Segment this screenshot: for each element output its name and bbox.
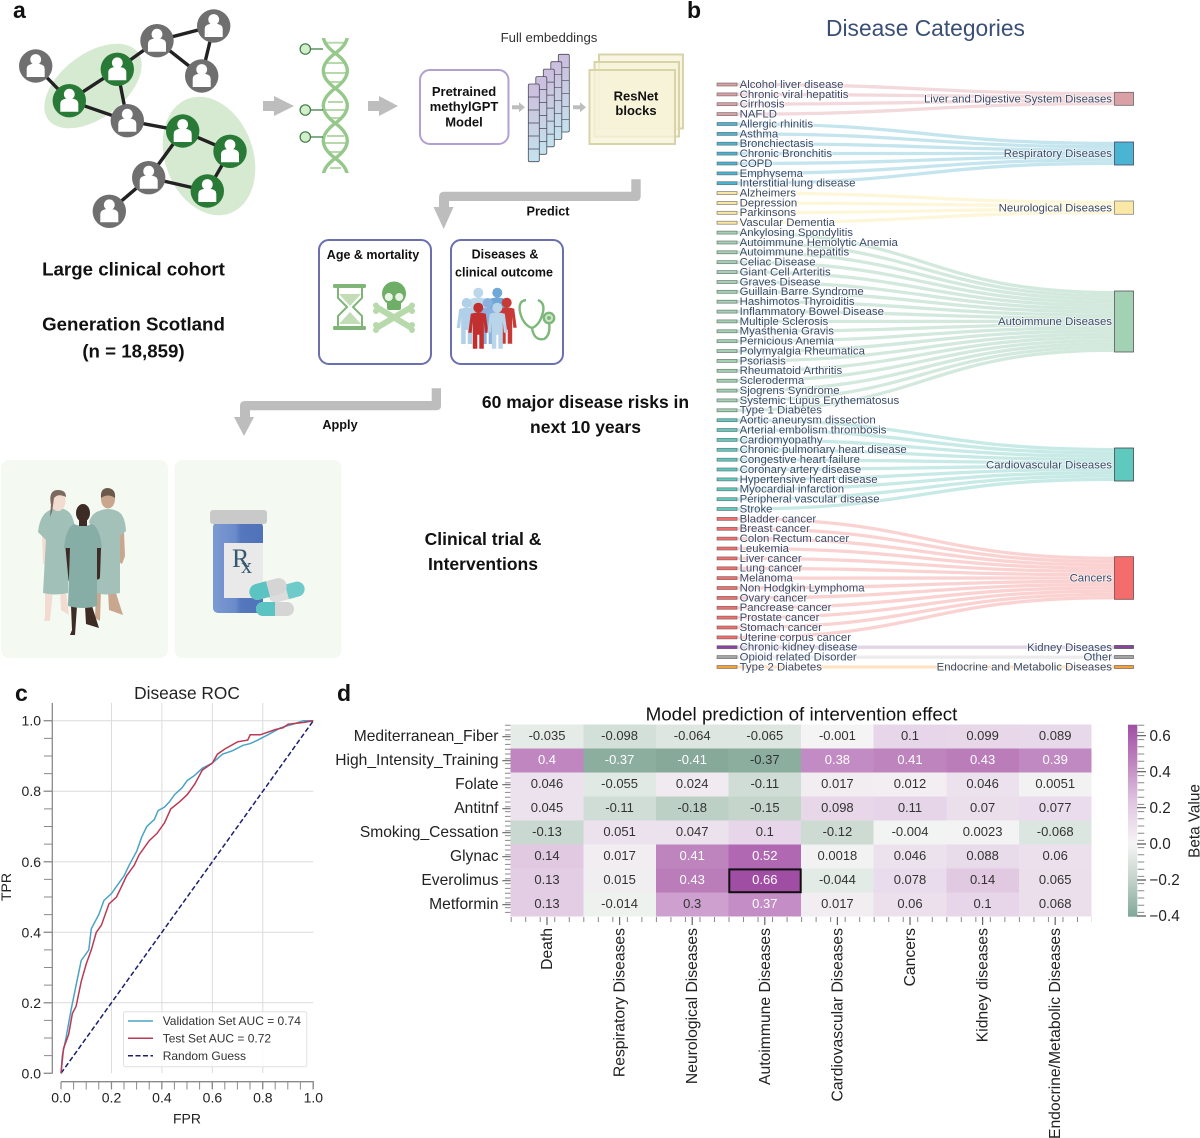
- left disease labels: Cardiomyopathy: [740, 434, 823, 446]
- left disease labels: Cirrhosis: [740, 99, 785, 111]
- legend: [124, 1012, 307, 1067]
- heatmap values: 0.098: [821, 800, 854, 815]
- box: diseases and clinical outcome: clinical outcome: [455, 266, 553, 280]
- left disease labels: COPD: [740, 158, 773, 170]
- left disease labels: Systemic Lupus Erythematosus: [740, 395, 899, 407]
- left disease labels: Chronic Bronchitis: [740, 148, 832, 160]
- heatmap values: -0.11: [750, 776, 779, 791]
- left disease labels: Rheumatoid Arthritis: [740, 365, 842, 377]
- heatmap values: -0.098: [601, 728, 638, 743]
- row labels: Folate: [455, 776, 498, 793]
- box: age and mortality: Age & mortality: [327, 248, 419, 262]
- legend: Test Set AUC = 0.72: [163, 1032, 271, 1046]
- heatmap values: 0.37: [752, 896, 777, 911]
- heatmap values: -0.065: [746, 728, 783, 743]
- left disease labels: Emphysema: [740, 168, 804, 180]
- left disease labels: Opioid related Disorder: [740, 651, 857, 663]
- legend: Random Guess: [163, 1049, 246, 1063]
- panel a: study workflow: [1, 0, 689, 658]
- label: predict: Predict: [526, 204, 570, 218]
- right category nodes and labels: Autoimmune Diseases: [998, 316, 1112, 328]
- colorbar: 0.6: [1150, 728, 1171, 745]
- heatmap values: -0.001: [819, 728, 856, 743]
- heatmap values: 0.52: [752, 848, 777, 863]
- left disease labels: Stomach cancer: [740, 622, 822, 634]
- heatmap values: 0.13: [534, 896, 560, 911]
- row labels: Smoking_Cessation: [360, 824, 498, 841]
- left disease labels: Alcohol liver disease: [740, 79, 843, 91]
- legend: Validation Set AUC = 0.74: [163, 1014, 301, 1028]
- heatmap values: 0.1: [901, 728, 919, 743]
- heatmap values: 0.047: [676, 824, 708, 839]
- heatmap values: 0.024: [676, 776, 708, 791]
- heatmap values: -0.068: [1037, 824, 1074, 839]
- heatmap values: 0.06: [1043, 848, 1068, 863]
- heatmap values: 0.088: [966, 848, 999, 863]
- heatmap values: 0.017: [603, 848, 636, 863]
- heatmap values: 0.0023: [963, 824, 1002, 839]
- heatmap cells: [511, 725, 1092, 917]
- right category nodes and labels: Other: [1084, 652, 1112, 664]
- icon: stethoscope: [520, 300, 554, 339]
- icon: DNA methylation helix: [300, 38, 349, 173]
- heatmap values: -0.014: [601, 896, 638, 911]
- left disease labels: Congestive heart failure: [740, 454, 860, 466]
- heatmap values: 0.11: [898, 800, 922, 815]
- y tick labels: 1.0: [22, 713, 41, 729]
- y tick labels: 0.0: [22, 1065, 41, 1081]
- arrow: network to DNA: [263, 96, 294, 116]
- ResNet blocks: blocks: [615, 103, 657, 118]
- x tick labels: 0.0: [51, 1090, 71, 1106]
- y tick labels: 0.6: [22, 854, 41, 870]
- panel d: intervention heatmap: [335, 680, 1200, 1138]
- text: 60 major disease risks: next 10 years: [530, 417, 641, 437]
- left disease labels: Pernicious Anemia: [740, 336, 835, 348]
- heatmap values: 0.046: [966, 776, 999, 791]
- left disease labels: Lung cancer: [740, 563, 802, 575]
- heatmap values: 0.051: [603, 824, 636, 839]
- row labels: Metformin: [429, 896, 498, 913]
- left disease labels: Vascular Dementia: [740, 217, 836, 229]
- heading: cohort: (n = 18,859): [82, 340, 185, 362]
- column labels: Endocrine/Metabolic Diseases: [1047, 928, 1064, 1138]
- panel b: disease categories sankey: [687, 0, 1134, 674]
- box: age and mortality: [319, 240, 431, 364]
- heatmap values: 0.065: [1039, 872, 1071, 887]
- right category nodes and labels: Cardiovascular Diseases: [986, 459, 1112, 471]
- left disease labels: [740, 79, 907, 673]
- left disease labels: Coronary artery disease: [740, 464, 861, 476]
- highlighted cell: Everolimus, Autoimmune Diseases: [729, 869, 801, 892]
- left disease labels: Multiple Sclerosis: [740, 316, 829, 328]
- panel: pill bottle illustration: [174, 460, 342, 658]
- left disease labels: Parkinsons: [740, 207, 796, 219]
- left disease labels: Psoriasis: [740, 355, 786, 367]
- left disease labels: Hypertensive heart disease: [740, 474, 878, 486]
- heading: cohort: [42, 258, 225, 362]
- left disease labels: Ankylosing Spondylitis: [740, 227, 853, 239]
- left disease labels: NAFLD: [740, 108, 777, 120]
- right category nodes and labels: [924, 92, 1134, 674]
- heatmap values: 0.39: [1043, 752, 1068, 767]
- heatmap values: 0.0051: [1035, 776, 1075, 791]
- left disease labels: Bladder cancer: [740, 513, 816, 525]
- column labels: Autoimmune Diseases: [757, 928, 774, 1085]
- left disease labels: Giant Cell Arteritis: [740, 267, 831, 279]
- heading: cohort: Generation Scotland: [42, 314, 225, 334]
- box: diseases and clinical outcome: [451, 240, 563, 364]
- left disease labels: Chronic kidney disease: [740, 642, 857, 654]
- column labels: Death: [539, 928, 556, 970]
- heatmap values: 0.046: [894, 848, 926, 863]
- heatmap values: 0.012: [894, 776, 926, 791]
- heatmap values: 0.045: [531, 800, 563, 815]
- label: full embeddings: Full embeddings: [501, 30, 598, 45]
- row labels: Everolimus: [421, 872, 499, 889]
- heatmap values: 0.43: [680, 872, 705, 887]
- x tick labels: 0.8: [253, 1090, 273, 1106]
- heatmap values: 0.015: [603, 872, 636, 887]
- sankey links: [737, 84, 1114, 667]
- column labels: Cardiovascular Diseases: [829, 928, 846, 1102]
- left disease labels: Type 1 Diabetes: [740, 405, 822, 417]
- left disease labels: Hashimotos Thyroiditis: [740, 296, 855, 308]
- left disease labels: Interstitial lung disease: [740, 178, 855, 190]
- heatmap values: 0.13: [534, 872, 560, 887]
- right category nodes and labels: Cancers: [1070, 573, 1112, 585]
- heatmap values: -0.035: [529, 728, 565, 743]
- column labels: Respiratory Diseases: [612, 928, 629, 1077]
- left disease labels: Allergic rhinitis: [740, 118, 813, 130]
- left disease labels: Liver cancer: [740, 553, 802, 565]
- ResNet blocks: [590, 54, 683, 144]
- panel: pill bottle illustration: x: [241, 553, 252, 578]
- right category nodes and labels: Respiratory Diseases: [1004, 148, 1112, 160]
- heatmap values: -0.004: [892, 824, 928, 839]
- left disease labels: Myocardial infarction: [740, 484, 844, 496]
- x axis label: FPR: [173, 1110, 201, 1126]
- column labels: Cancers: [902, 928, 919, 986]
- heatmap values: 0.1: [756, 824, 774, 839]
- y tick labels: 0.8: [22, 783, 41, 799]
- heatmap values: 0.3: [683, 896, 701, 911]
- left disease labels: Celiac Disease: [740, 257, 816, 269]
- left disease labels: Graves Disease: [740, 276, 821, 288]
- icon: hourglass: [333, 284, 366, 330]
- heatmap values: -0.11: [605, 800, 634, 815]
- row labels: Mediterranean_Fiber: [354, 728, 498, 745]
- left disease labels: Myasthenia Gravis: [740, 326, 834, 338]
- random guess line: [61, 721, 313, 1073]
- heatmap values: 0.41: [680, 848, 705, 863]
- left disease labels: Leukemia: [740, 543, 790, 555]
- left disease labels: Inflammatory Bowel Disease: [740, 306, 884, 318]
- left disease labels: Alzheimers: [740, 188, 796, 200]
- x tick labels: 1.0: [304, 1090, 323, 1106]
- left disease labels: Chronic viral hepatitis: [740, 89, 849, 101]
- row labels: Antitnf: [454, 800, 499, 817]
- left disease labels: Autoimmune Hemolytic Anemia: [740, 237, 899, 249]
- left disease labels: Guillain Barre Syndrome: [740, 286, 864, 298]
- heading: disease categories: Disease Categories: [826, 15, 1025, 41]
- heatmap values: -0.055: [601, 776, 638, 791]
- colorbar: 0.0: [1150, 836, 1171, 853]
- box: pretrained methylGPT model: Model: [445, 114, 483, 130]
- heatmap values: -0.37: [750, 752, 780, 767]
- column labels: Kidney diseases: [975, 928, 992, 1042]
- left disease labels: Polymyalgia Rheumatica: [740, 346, 866, 358]
- left disease labels: Melanoma: [740, 572, 793, 584]
- heatmap values: 0.017: [821, 776, 854, 791]
- chart title: Disease ROC: [134, 683, 240, 703]
- patient network graph: [19, 9, 271, 228]
- text: clinical trial and interventions: Interventions: [428, 554, 538, 574]
- heatmap values: -0.15: [750, 800, 780, 815]
- heatmap values: 0.43: [970, 752, 995, 767]
- heatmap values: -0.12: [823, 824, 852, 839]
- x tick labels: 0.6: [203, 1090, 222, 1106]
- colorbar: 0.2: [1150, 800, 1171, 817]
- left disease labels: Chronic pulmonary heart disease: [740, 444, 907, 456]
- panel: patients illustration: [1, 460, 168, 658]
- validation ROC curve: [61, 721, 313, 1073]
- text: clinical trial and interventions: Clinical trial &: [425, 529, 542, 549]
- row labels: Glynac: [450, 848, 499, 865]
- y tick labels: 0.4: [22, 924, 41, 940]
- colorbar: 0.4: [1150, 764, 1171, 781]
- heatmap values: 0.1: [974, 896, 992, 911]
- left disease labels: Ovary cancer: [740, 592, 808, 604]
- ResNet blocks: ResNet: [614, 88, 659, 104]
- colorbar: −0.4: [1150, 908, 1180, 925]
- heatmap values: 0.07: [970, 800, 995, 815]
- heatmap values: 0.66: [752, 872, 777, 887]
- colorbar: [1128, 725, 1200, 925]
- left disease labels: Autoimmune hepatitis: [740, 247, 849, 259]
- heatmap values: -0.044: [819, 872, 856, 887]
- left disease labels: Depression: [740, 197, 797, 209]
- label: apply: Apply: [322, 418, 358, 432]
- left disease labels: Bronchiectasis: [740, 138, 814, 150]
- box: pretrained methylGPT model: Pretrained: [432, 84, 496, 99]
- heatmap values: 0.099: [966, 728, 999, 743]
- arrow: model to embeddings: [512, 102, 525, 112]
- left disease labels: Stroke: [740, 503, 773, 515]
- left disease labels: Type 2 Diabetes: [740, 661, 822, 673]
- heatmap values: 0.068: [1039, 896, 1071, 911]
- heatmap values: -0.41: [677, 752, 707, 767]
- heatmap values: 0.077: [1039, 800, 1071, 815]
- arrow: DNA to model: [368, 96, 398, 116]
- heatmap values: 0.4: [538, 752, 556, 767]
- heading: cohort: Large clinical cohort: [42, 258, 225, 280]
- heatmap values: [529, 728, 1075, 911]
- left disease labels: Asthma: [740, 128, 779, 140]
- heatmap values: 0.06: [897, 896, 923, 911]
- left disease labels: Peripheral vascular disease: [740, 494, 880, 506]
- heatmap values: 0.14: [534, 848, 560, 863]
- left disease nodes: [717, 83, 737, 668]
- box: pretrained methylGPT model: [420, 70, 508, 144]
- left disease labels: Breast cancer: [740, 523, 810, 535]
- left disease labels: Pancrease cancer: [740, 602, 832, 614]
- icon: patient group: [457, 288, 517, 349]
- x tick labels: 0.4: [152, 1090, 172, 1106]
- row labels: High_Intensity_Training: [335, 752, 498, 769]
- left disease labels: Colon Rectum cancer: [740, 533, 849, 545]
- right category nodes and labels: Endocrine and Metabolic Diseases: [937, 662, 1112, 674]
- heatmap values: 0.41: [897, 752, 923, 767]
- y tick labels: 0.2: [22, 995, 41, 1011]
- text: 60 major disease risks: 60 major disease risks in: [482, 392, 689, 412]
- heatmap values: 0.38: [825, 752, 850, 767]
- left disease labels: Prostate cancer: [740, 612, 820, 624]
- heatmap values: -0.37: [605, 752, 634, 767]
- arrow: embeddings to ResNet: [573, 102, 586, 112]
- panel letter d: d: [337, 680, 351, 706]
- box: pretrained methylGPT model: methylGPT: [430, 99, 498, 114]
- row labels: [335, 728, 499, 913]
- panel: pill bottle illustration: R: [232, 544, 250, 573]
- heatmap values: 0.078: [894, 872, 926, 887]
- left disease labels: Sjogrens Syndrome: [740, 385, 840, 397]
- text: 60 major disease risks: [482, 392, 689, 437]
- heatmap title: Model prediction of intervention effect: [646, 704, 958, 725]
- heatmap values: -0.064: [674, 728, 711, 743]
- heatmap values: 0.0018: [818, 848, 857, 863]
- text: clinical trial and interventions: [425, 529, 542, 574]
- x tick labels: [51, 1090, 323, 1106]
- right category nodes and labels: Neurological Diseases: [999, 202, 1112, 214]
- arrow: predict: [434, 179, 641, 229]
- axes: [44, 703, 314, 1089]
- left disease labels: Scleroderma: [740, 375, 805, 387]
- heatmap values: -0.13: [532, 824, 562, 839]
- right category nodes and labels: Kidney Diseases: [1027, 642, 1112, 654]
- icon: skull and crossbones: [373, 282, 415, 333]
- left disease labels: Non Hodgkin Lymphoma: [740, 582, 865, 594]
- heatmap values: 0.046: [531, 776, 563, 791]
- left disease labels: Uterine corpus cancer: [740, 632, 851, 644]
- heatmap values: -0.18: [677, 800, 707, 815]
- arrow: apply: [234, 388, 441, 436]
- panel c: ROC chart: [0, 680, 323, 1126]
- right category nodes and labels: Liver and Digestive System Diseases: [924, 94, 1112, 106]
- embeddings stack: [528, 54, 569, 162]
- column labels: [539, 928, 1064, 1138]
- y tick labels: [22, 713, 41, 1081]
- heatmap values: 0.14: [970, 872, 995, 887]
- heatmap values: 0.089: [1039, 728, 1071, 743]
- left disease labels: Aortic aneurysm dissection: [740, 415, 876, 427]
- column labels: Neurological Diseases: [684, 928, 701, 1084]
- left disease labels: Arterial embolism thrombosis: [740, 424, 887, 436]
- x tick labels: 0.2: [102, 1090, 121, 1106]
- panel letter c: c: [15, 680, 28, 706]
- colorbar: −0.2: [1150, 872, 1180, 889]
- heatmap values: 0.017: [821, 896, 854, 911]
- box: diseases and clinical outcome: Diseases &: [472, 248, 538, 262]
- test ROC curve: [61, 721, 313, 1073]
